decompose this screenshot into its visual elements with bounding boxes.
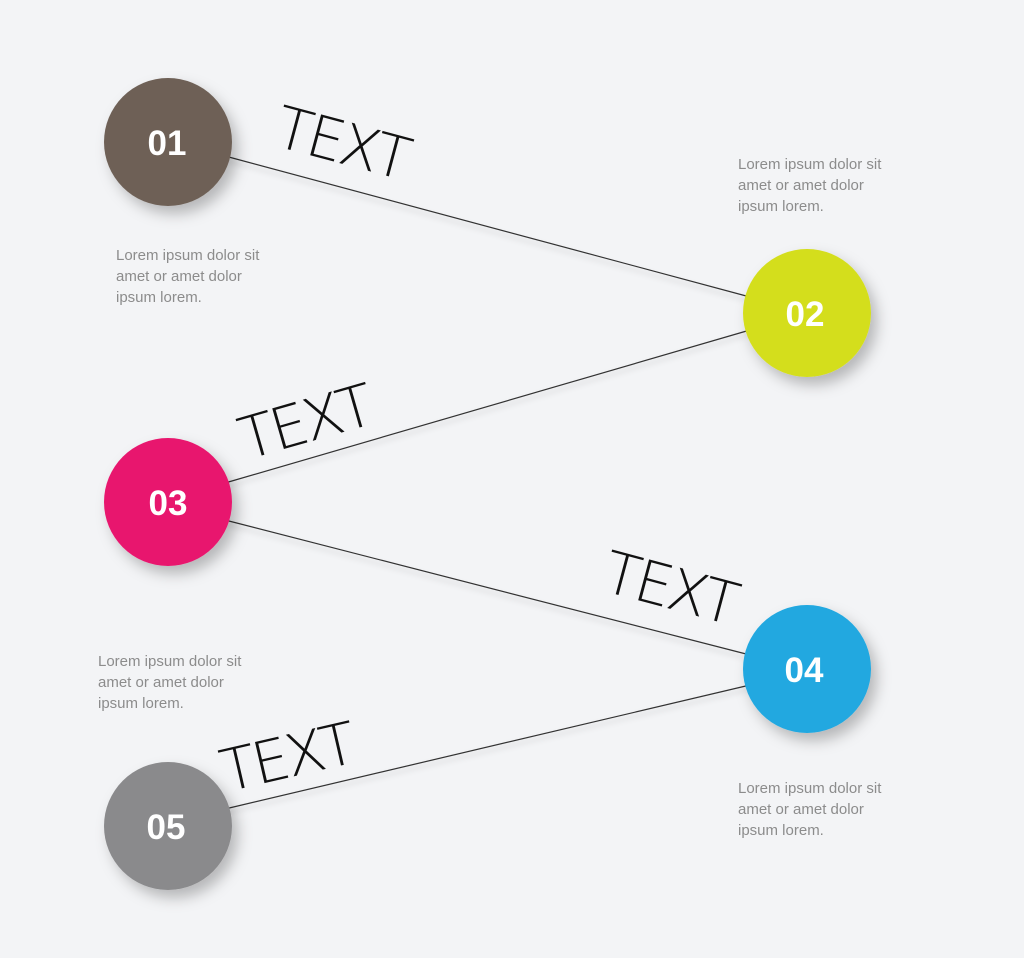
label: TEXT 4: TEXT — [214, 709, 362, 806]
text block 01: amet or amet dolor — [116, 268, 242, 285]
circle 05: 05 — [147, 808, 185, 847]
label: TEXT 1: TEXT — [268, 93, 418, 194]
text block 02 — [738, 156, 882, 215]
text block 05: ipsum lorem. — [98, 695, 184, 712]
text block 05: Lorem ipsum dolor sit — [98, 653, 242, 670]
text block 02: ipsum lorem. — [738, 198, 824, 215]
circle 02 — [743, 249, 871, 377]
text block 04: amet or amet dolor — [738, 801, 864, 818]
text block 02: Lorem ipsum dolor sit — [738, 156, 882, 173]
text block 05: amet or amet dolor — [98, 674, 224, 691]
circle 04 — [743, 605, 871, 733]
label: TEXT 2: TEXT — [231, 370, 381, 473]
text block 04: ipsum lorem. — [738, 822, 824, 839]
text block 01: ipsum lorem. — [116, 289, 202, 306]
circle 04: 04 — [785, 651, 824, 690]
circle 01 — [104, 78, 232, 206]
text block 01: Lorem ipsum dolor sit — [116, 247, 260, 264]
circle 05 — [104, 762, 232, 890]
text block 04: Lorem ipsum dolor sit — [738, 780, 882, 797]
label: TEXT 3: TEXT — [596, 538, 746, 639]
circle 02: 02 — [786, 295, 824, 334]
text block 04 — [738, 780, 882, 839]
circle 03 — [104, 438, 232, 566]
circle 01: 01 — [148, 124, 186, 163]
text block 05 — [98, 653, 242, 712]
circle 03: 03 — [149, 484, 187, 523]
text block 02: amet or amet dolor — [738, 177, 864, 194]
text block 01 — [116, 247, 260, 306]
connector lines — [225, 156, 750, 809]
